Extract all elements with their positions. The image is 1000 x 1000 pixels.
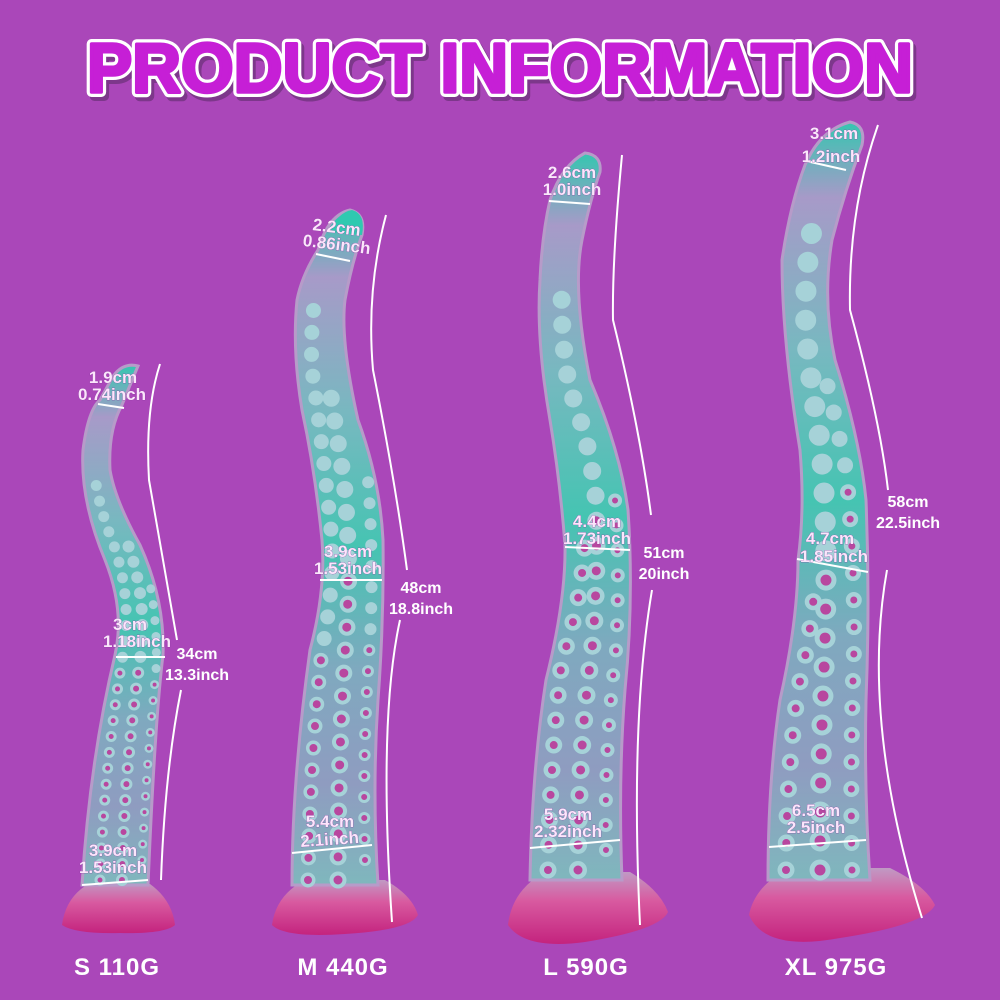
suckers S bbox=[94, 470, 156, 880]
measurements M: 5.4cm bbox=[306, 812, 354, 831]
length bracket XL bbox=[850, 125, 922, 918]
measurements L: 2.32inch bbox=[534, 822, 602, 841]
measurements S: 1.18inch bbox=[103, 632, 171, 651]
size label M: M 440G bbox=[297, 954, 389, 981]
measurements L bbox=[534, 163, 689, 841]
body L bbox=[530, 153, 630, 880]
diameter lines bbox=[82, 161, 868, 885]
size label XL: XL 975G bbox=[785, 954, 887, 981]
product XL bbox=[749, 122, 935, 942]
measurements M: 3.9cm bbox=[324, 542, 372, 561]
suckers L bbox=[548, 280, 618, 870]
measurements S: 3.9cm bbox=[89, 841, 137, 860]
suckers XL bbox=[786, 230, 854, 870]
measurements L: 2.6cm bbox=[548, 163, 596, 182]
measurements XL: 4.7cm bbox=[806, 529, 854, 548]
measurements S: 3cm bbox=[113, 615, 147, 634]
measurements XL: 3.1cm bbox=[810, 124, 858, 143]
measurements S: 0.74inch bbox=[78, 385, 146, 404]
measurements XL: 1.85inch bbox=[800, 547, 868, 566]
product L bbox=[508, 153, 668, 944]
title: PRODUCT INFORMATION bbox=[87, 29, 913, 107]
measurements M: 0.86inch bbox=[302, 231, 372, 258]
body S bbox=[82, 365, 163, 885]
measurements L: 1.73inch bbox=[563, 529, 631, 548]
title: PRODUCT INFORMATION bbox=[87, 29, 913, 107]
measurements S: 1.53inch bbox=[79, 858, 147, 877]
measurements L: 5.9cm bbox=[544, 805, 592, 824]
suckers M bbox=[308, 290, 372, 880]
base S bbox=[62, 882, 175, 933]
tip M bbox=[330, 210, 363, 235]
measurements S: 13.3inch bbox=[165, 667, 229, 684]
measurements M: 1.53inch bbox=[314, 559, 382, 578]
length bracket S bbox=[148, 364, 181, 880]
measurements M: 18.8inch bbox=[389, 601, 453, 618]
measurements S: 1.9cm bbox=[89, 368, 137, 387]
measurements L: 51cm bbox=[644, 545, 684, 562]
measurements XL: 6.5cm bbox=[792, 801, 840, 820]
length bracket L bbox=[613, 155, 652, 925]
length bracket M bbox=[371, 215, 407, 922]
measurements XL: 58cm bbox=[888, 494, 928, 511]
measurements L: 20inch bbox=[639, 566, 689, 583]
measurements XL bbox=[787, 124, 940, 837]
measurements M: 48cm bbox=[401, 580, 441, 597]
measurements XL: 2.5inch bbox=[787, 818, 845, 837]
product M bbox=[272, 210, 418, 935]
body XL bbox=[768, 122, 870, 880]
base XL bbox=[749, 868, 935, 942]
size label S: S 110G bbox=[74, 954, 160, 981]
measurements S bbox=[78, 368, 229, 877]
base L bbox=[508, 872, 668, 944]
measurements XL: 22.5inch bbox=[876, 515, 940, 532]
measurements M: 2.1inch bbox=[300, 828, 360, 851]
base M bbox=[272, 880, 418, 935]
product S bbox=[62, 365, 175, 933]
body M bbox=[292, 210, 383, 885]
measurements XL: 1.2inch bbox=[802, 147, 860, 166]
measurements L: 4.4cm bbox=[573, 512, 621, 531]
size label L: L 590G bbox=[543, 954, 629, 981]
measurements L: 1.0inch bbox=[543, 180, 601, 199]
measurements S: 34cm bbox=[177, 646, 217, 663]
measurements M: 2.2cm bbox=[312, 215, 362, 240]
measurements M bbox=[300, 215, 453, 851]
title: PRODUCT INFORMATION bbox=[90, 33, 916, 111]
